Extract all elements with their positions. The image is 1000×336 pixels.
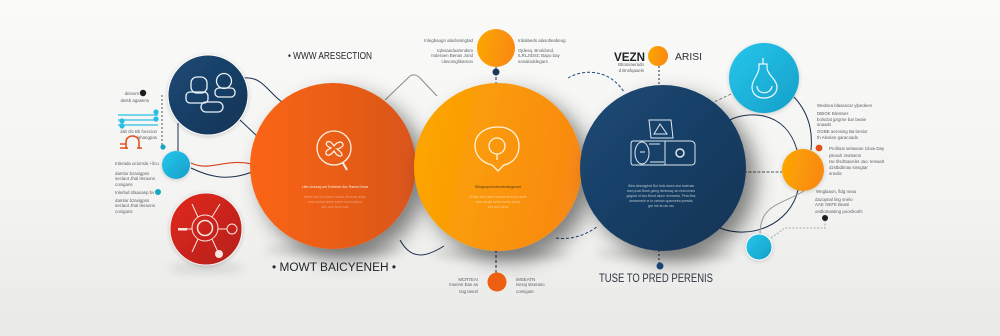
- left annotation: top label: deinom: [125, 91, 139, 96]
- text block: gar me fa ran ras: [648, 204, 674, 208]
- right annotation: middle: Prollioai selasean 1/Iuw Day: [829, 146, 885, 151]
- text: top left of node: [424, 38, 474, 64]
- text: top right of node: ILRLJIDSC Bapo bay: [518, 53, 561, 58]
- cyan node left: [162, 151, 190, 179]
- text: bottom left of node: [449, 277, 479, 294]
- heading: bottom right: TUSE TO PRED PERENIS: [599, 273, 713, 285]
- cyan small dot: [160, 144, 166, 150]
- left annotation: top label: [120, 91, 150, 103]
- text: top left of node: clavomglitiamon: [442, 59, 474, 64]
- left annotation: middle label: Jalt cfe Bk forecion: [120, 129, 158, 134]
- right annotation: middle: snedis: [829, 171, 842, 176]
- left annotation: middle label: [120, 129, 158, 140]
- text: VEZN sub: [618, 62, 645, 73]
- heading: bottom left: • MOWT BAICYENEH •: [272, 262, 396, 274]
- text: top right of node: sonalouldegars: [518, 59, 549, 64]
- icon: red arch: [120, 136, 142, 149]
- text block: [626, 184, 696, 208]
- bulb circle: [729, 43, 799, 113]
- left annotation: lower labels: [115, 161, 159, 214]
- bottom orange node: [488, 272, 506, 292]
- right annotation: upper: snaads: [817, 122, 832, 127]
- left annotation: lower labels: Inlerada aclonsla +/lcu: [115, 161, 159, 166]
- text block: dearament or to ranean quansetra preadis: [629, 199, 693, 203]
- right annotation: middle: [829, 146, 885, 176]
- panel: navy people circle: [168, 55, 248, 135]
- right annotation: upper: bolsclat jprgme bar beaie: [817, 117, 867, 122]
- right annotation: middle: dzstbdtinas sinsgtar: [829, 165, 868, 170]
- left annotation: lower labels: seclaot Jhal Ileraons: [115, 176, 156, 181]
- text: top left of node: Inderaen Benas Jond: [431, 53, 474, 58]
- heading: VEZN: VEZN: [614, 50, 645, 64]
- icon: magnifier: [317, 131, 351, 170]
- connector lines: [162, 66, 825, 273]
- text: top right of node: Ojdesq. Bnoldond.: [518, 48, 554, 53]
- text: bottom right of node: IMSEATN: [516, 277, 535, 282]
- right annotation: lower: Wnglaaon, fldg neau: [816, 189, 857, 194]
- left annotation: lower labels: conigans: [115, 209, 133, 214]
- text block: Lifes Actoreg ast Eveletart Anc Raens Dewa: [302, 185, 368, 189]
- icon: black dot: [140, 90, 146, 96]
- text block: Wea dessigphst Boi tods dares ane balenas: [628, 184, 694, 188]
- navy bottom dot: [656, 262, 664, 270]
- right annotation: middle: pleoalr Jeatsens: [829, 153, 862, 158]
- main panel: navy circle: [580, 85, 746, 251]
- cyan small marker: [155, 189, 161, 195]
- left annotation: middle label: lshangpas: [137, 135, 158, 140]
- right annotation: lower: ondlomasting pooshoofs: [815, 209, 863, 214]
- text: top left of node: Iqlosaeduamndsm: [437, 48, 473, 53]
- top orange node: [477, 29, 515, 67]
- right annotation: middle: Ise IllsdSaaAlet Jao. tenwalt: [829, 159, 885, 164]
- main panel: amber circle: setu sanad ames lorem dorsa: [476, 200, 520, 204]
- ground shadows: [168, 246, 735, 271]
- orange-red dot: [816, 145, 822, 151]
- VEZN orange node: [648, 46, 668, 66]
- top small dot: [492, 68, 500, 76]
- text: top left of node: Inlegbaugn alaclaningtad: [424, 38, 474, 43]
- text: top right of node: [518, 38, 566, 64]
- cyan node lower right: [746, 234, 772, 260]
- right annotation: upper: Wedsea blaasscar ylpedeen: [817, 103, 873, 108]
- text: bottom right of node: [516, 277, 545, 294]
- left annotation: lower labels: conigans: [115, 182, 133, 187]
- main panel: amber circle: [414, 83, 582, 251]
- text block: and proat Bosk gaing dentusay an estorumes: [627, 189, 695, 193]
- main panel: orange circle: setu sanad ames lorem dorsa plane: [308, 200, 362, 204]
- text: bottom right of node: comigute: [516, 289, 534, 294]
- right annotation: upper: DBIOK Blestses: [817, 111, 849, 116]
- left annotation: lower labels: seclaot Jhal Ileraons: [115, 203, 156, 208]
- right annotation: lower: dazopnal ling snelo: [815, 197, 853, 202]
- text: top right of node: Inbalaeds alasolteabeug: [518, 38, 566, 43]
- icon: hub: [178, 204, 237, 258]
- panel: red hub circle: [170, 193, 242, 265]
- right annotation: lower: [815, 189, 863, 214]
- right annotation: upper: [817, 103, 873, 140]
- orange node right: [782, 149, 824, 191]
- left annotation: top label: detsb agasens: [120, 98, 150, 103]
- icon: light bulb: [752, 58, 777, 98]
- right annotation: lower: AAE OEFE Beasi: [815, 202, 849, 207]
- text: bottom right of node: Iseraj stseraso: [516, 282, 545, 287]
- right annotation: upper: GGBE aerosing Ba beslor: [817, 129, 868, 134]
- black dot right: [822, 215, 828, 221]
- text: bottom left of node: MCRTEAI: [458, 277, 478, 282]
- left annotation: lower labels: damlar bzasigpss: [115, 171, 150, 176]
- text block: Wlegbayuhmterodeatogmaet: [475, 185, 521, 189]
- text: bottom left of node: Inseinn Eas as: [449, 282, 479, 287]
- text: bottom left of node: tsig tasrel: [459, 289, 478, 294]
- text: VEZN sub: Bttossaeradn: [618, 62, 645, 67]
- heading: ARISI: ARISI: [675, 51, 702, 63]
- icon: speech target: [475, 127, 519, 171]
- text block: gagnat of sha Bond aluce remnesia, Peta Bas: [626, 194, 696, 198]
- icon: camera device: [631, 120, 695, 165]
- main panel: orange circle: Boles act ext Lanet coreas demoon anes: [304, 195, 366, 199]
- main panel: amber circle: lors ane loros: [488, 205, 508, 209]
- text: VEZN sub: d Bnsfqaaels: [619, 68, 645, 73]
- main panel: amber circle: Brolas ant Lanet coreas demoon anes: [469, 195, 527, 199]
- heading: top left: • WWW ARESECTION: [288, 51, 372, 62]
- main panel: orange circle: [250, 83, 416, 249]
- icon: people: [186, 74, 235, 112]
- left annotation: lower labels: damlar bzasigpss: [115, 198, 150, 203]
- left annotation: lower labels: Inlerlad sfaaoasp bv: [115, 190, 155, 195]
- right annotation: upper: th Aleelan garacoads: [817, 135, 859, 140]
- icon: cyan sliders: [118, 110, 158, 128]
- main panel: orange circle: lors ane loros ans: [322, 205, 349, 209]
